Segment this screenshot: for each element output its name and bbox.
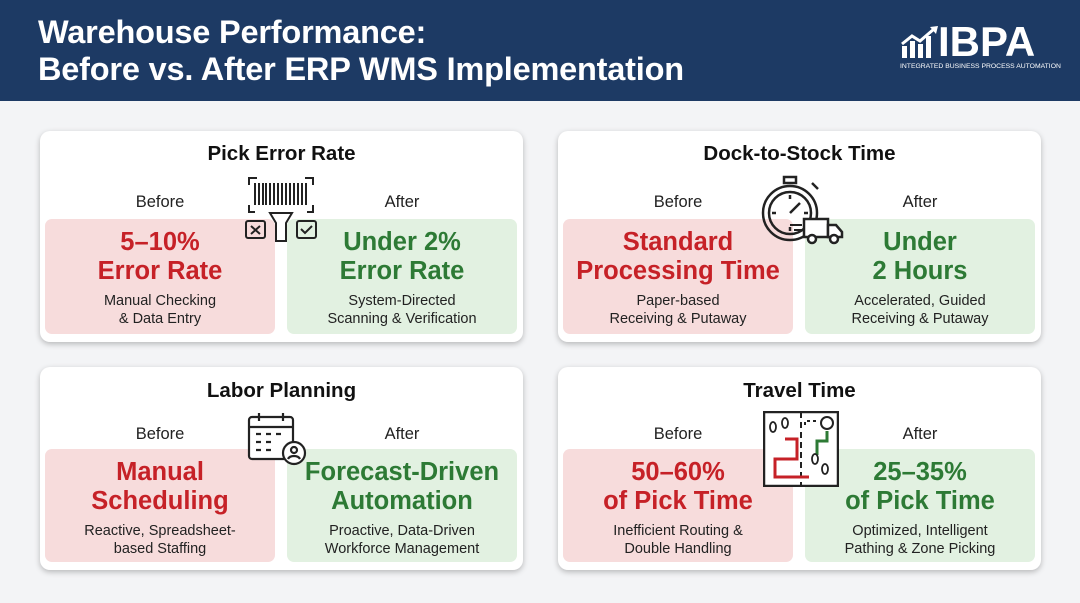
after box: Optimized, Intelligent — [852, 523, 988, 539]
panel: pick error rate: Before — [136, 193, 184, 211]
panel: labor planning: Labor Planning — [207, 379, 356, 402]
after box: Accelerated, Guided — [854, 293, 986, 309]
before box: Standard — [623, 228, 733, 256]
icon: calendar with gear — [248, 413, 306, 466]
before box — [45, 219, 275, 334]
before box: of Pick Time — [603, 486, 753, 514]
title: Before vs. After ERP WMS Implementation — [38, 51, 684, 87]
after box: of Pick Time — [845, 486, 995, 514]
panel: dock-to-stock time: Dock-to-Stock Time — [703, 142, 896, 165]
panel: dock-to-stock time: After — [903, 193, 937, 211]
before box: Receiving & Putaway — [609, 311, 746, 327]
after box: Under 2% — [343, 228, 461, 256]
after box: Pathing & Zone Picking — [845, 541, 995, 557]
before box: & Data Entry — [119, 311, 201, 327]
icon: stopwatch with truck — [762, 176, 844, 244]
before box: Processing Time — [576, 256, 780, 284]
icon: route map — [763, 411, 839, 487]
before box: Manual — [116, 458, 204, 486]
before box: Manual Checking — [104, 293, 216, 309]
panel: labor planning: Before — [136, 425, 184, 443]
title — [38, 14, 684, 87]
panel: pick error rate — [40, 131, 523, 342]
before box: Double Handling — [624, 541, 732, 557]
after box — [287, 219, 517, 334]
after box — [805, 449, 1035, 562]
panel: dock-to-stock time — [558, 131, 1041, 342]
after box: Under — [883, 228, 957, 256]
panel: labor planning: After — [385, 425, 419, 443]
after box — [805, 219, 1035, 334]
panel: travel time — [558, 367, 1041, 570]
before box: Paper-based — [636, 293, 720, 309]
after box: 25–35% — [873, 458, 967, 486]
after box: Proactive, Data-Driven — [329, 523, 475, 539]
before box — [563, 219, 793, 334]
before box — [563, 449, 793, 562]
logo: IBPA — [900, 18, 1061, 70]
before box: Reactive, Spreadsheet- — [84, 523, 236, 539]
panel: travel time: After — [903, 425, 937, 443]
before box: based Staffing — [114, 541, 206, 557]
panel: labor planning — [40, 367, 523, 570]
icon: barcode scanner — [245, 177, 317, 242]
header bar — [0, 0, 1080, 101]
panel: pick error rate: Pick Error Rate — [207, 142, 356, 165]
after box: Error Rate — [340, 256, 464, 284]
before box: 5–10% — [120, 228, 200, 256]
after box: Automation — [331, 486, 473, 514]
after box: Workforce Management — [325, 541, 479, 557]
after box: System-Directed — [348, 293, 456, 309]
title: Warehouse Performance: — [38, 14, 426, 50]
after box: Receiving & Putaway — [851, 311, 988, 327]
panel: dock-to-stock time: Before — [654, 193, 702, 211]
before box — [45, 449, 275, 562]
before box: Scheduling — [91, 486, 229, 514]
after box: 2 Hours — [873, 256, 967, 284]
before box: 50–60% — [631, 458, 725, 486]
panel: pick error rate: After — [385, 193, 419, 211]
after box: Forecast-Driven — [305, 458, 499, 486]
after box — [287, 449, 517, 562]
panel: travel time: Travel Time — [743, 379, 856, 402]
before box: Error Rate — [98, 256, 222, 284]
panel: travel time: Before — [654, 425, 702, 443]
after box: Scanning & Verification — [327, 311, 477, 327]
logo: IBPA: IBPA — [938, 18, 1035, 65]
logo: IBPA: INTEGRATED BUSINESS PROCESS AUTOMATION — [900, 63, 1061, 70]
before box: Inefficient Routing & — [613, 523, 743, 539]
